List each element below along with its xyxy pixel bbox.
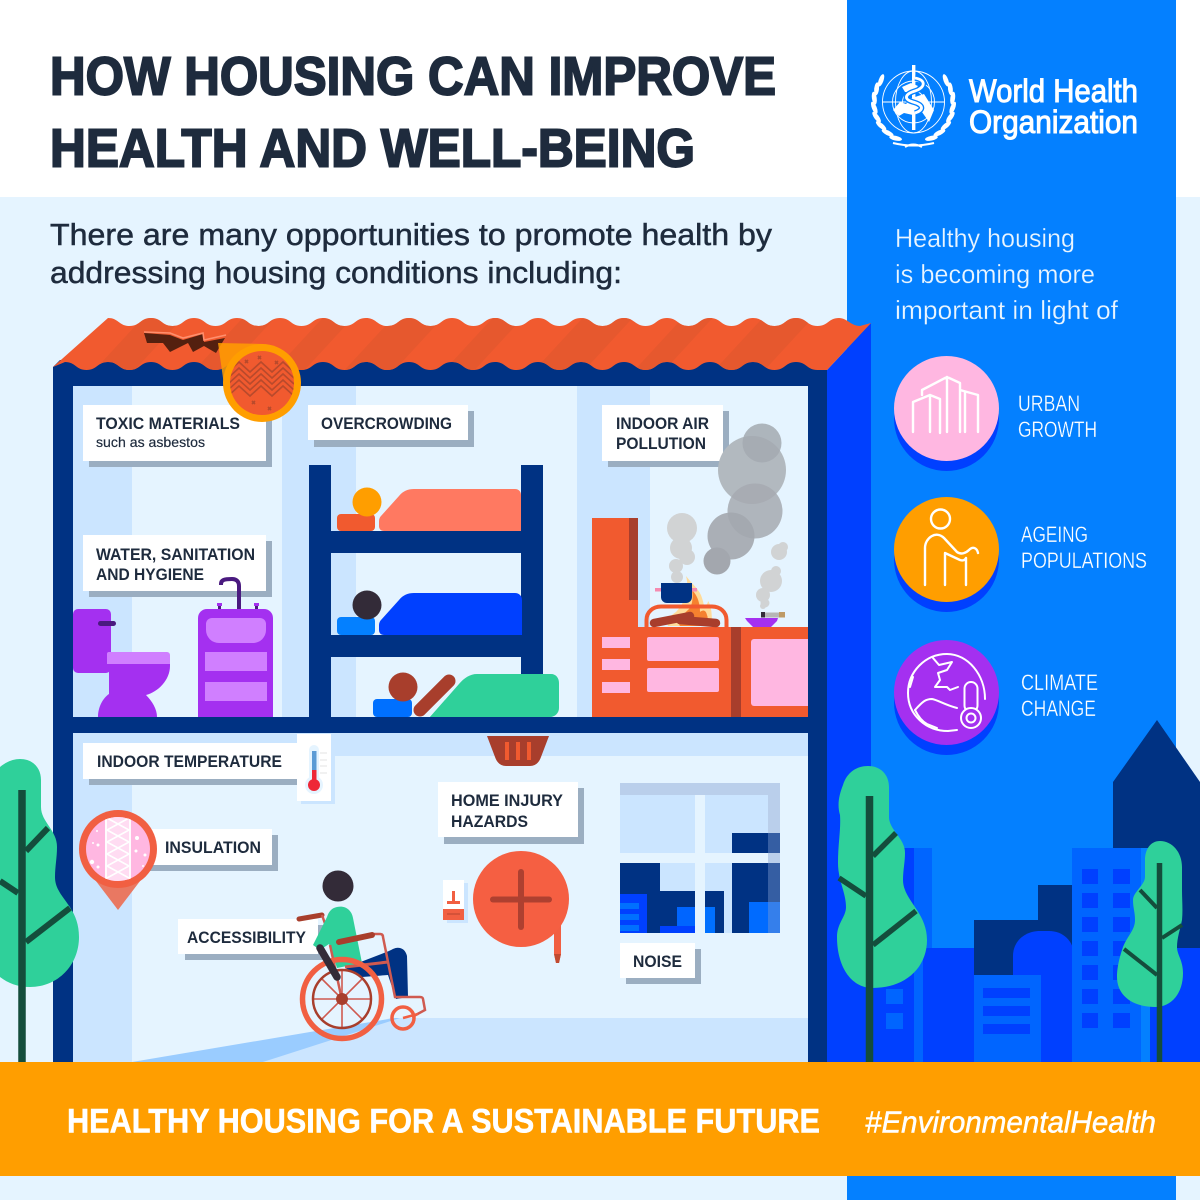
slogan: HEALTHY HOUSING FOR A SUSTAINABLE FUTURE	[67, 1102, 820, 1140]
intro text: There are many opportunities to promote health by	[50, 217, 773, 252]
text: healthy housing: is becoming more	[895, 259, 1095, 289]
logo wordmark: World Health	[969, 73, 1138, 109]
roof	[53, 318, 871, 370]
label: urban growth: GROWTH	[1018, 417, 1097, 442]
label: urban growth: URBAN	[1018, 391, 1080, 416]
item: climate change	[894, 640, 1098, 755]
icon: asbestos magnifier	[218, 343, 301, 422]
tree: right	[1117, 841, 1183, 1062]
icon: toilet	[73, 609, 170, 717]
label: climate change	[1021, 670, 1098, 721]
house: structure	[53, 360, 827, 1062]
fire logs	[654, 616, 716, 623]
intro text: addressing housing conditions including:	[50, 255, 622, 290]
label: ageing populations: AGEING	[1021, 522, 1088, 547]
footer banner	[0, 1062, 1200, 1176]
label: overcrowding	[308, 405, 474, 447]
icon: hot pan hazard	[473, 851, 569, 963]
illustration: bunk beds with occupants	[309, 465, 559, 717]
illustration: smoke	[667, 424, 788, 609]
ashtray and cigarette	[745, 612, 785, 627]
logo wordmark	[969, 73, 1138, 140]
illustration: city skyline	[871, 720, 1200, 1062]
icon: buildings	[913, 377, 978, 433]
tree: middle	[837, 766, 927, 1062]
label: accessibility: ACCESSIBILITY	[187, 929, 306, 947]
bottom sleeper	[373, 672, 559, 717]
label: noise: NOISE	[633, 953, 682, 971]
tree: left	[0, 759, 79, 1062]
text: healthy housing: important in light of	[895, 295, 1119, 325]
label: climate change: CHANGE	[1021, 696, 1096, 721]
icon: insulation map pin	[79, 810, 157, 910]
label: climate change: CLIMATE	[1021, 670, 1098, 695]
title: HOW HOUSING CAN IMPROVE	[50, 46, 776, 106]
wheelchair wheel	[302, 960, 382, 1038]
top sleeper	[337, 488, 521, 531]
label: indoor temperature: INDOOR TEMPERATURE	[97, 753, 282, 771]
label: toxic materials: TOXIC MATERIALS	[96, 415, 240, 433]
panel: WHO blue column	[847, 0, 1176, 1200]
label: indoor temperature	[83, 743, 303, 785]
logo: World Health Organization	[870, 65, 1138, 147]
icon: sink	[198, 579, 273, 717]
icon: older person with cane	[925, 510, 978, 585]
middle sleeper	[337, 590, 522, 635]
label: ageing populations: POPULATIONS	[1021, 548, 1147, 573]
icon: cracked roof	[144, 332, 226, 353]
logo wordmark: Organization	[969, 104, 1138, 140]
label: insulation: INSULATION	[165, 839, 261, 857]
intro text	[50, 217, 773, 290]
label: toxic materials	[83, 405, 272, 467]
label: insulation	[150, 829, 278, 871]
icon: WHO emblem	[870, 65, 957, 147]
label: noise	[620, 943, 701, 984]
label: water, sanitation and hygiene	[83, 535, 272, 597]
label: home injury hazards	[438, 782, 584, 844]
title	[50, 46, 776, 178]
illustration: kitchen	[592, 518, 808, 717]
icon: thermometer card	[297, 734, 335, 804]
hashtag: #EnvironmentalHealth	[865, 1104, 1156, 1140]
label: toxic materials: such as asbestos	[96, 434, 205, 450]
label: home injury hazards: HOME INJURY	[451, 792, 563, 810]
icon: globe with thermometer	[908, 654, 985, 731]
item: ageing populations	[894, 497, 1147, 612]
house: side wall	[827, 323, 871, 1062]
title: HEALTH AND WELL-BEING	[50, 118, 695, 178]
front caster	[392, 1007, 418, 1029]
label: water, sanitation and hygiene: WATER, SANITATION	[96, 546, 255, 564]
label: indoor air pollution: POLLUTION	[616, 435, 706, 453]
item: urban growth	[894, 356, 1097, 471]
label: home injury hazards: HAZARDS	[451, 813, 528, 831]
stove frame	[646, 606, 726, 627]
ceiling lamp	[487, 736, 549, 766]
text: healthy housing: Healthy housing	[895, 223, 1075, 253]
label: overcrowding: OVERCROWDING	[321, 415, 452, 433]
fire	[667, 576, 712, 626]
illustration: person in wheelchair	[299, 870, 425, 1038]
cooking pot	[655, 583, 697, 603]
icon: electrical socket	[443, 880, 468, 923]
label: ageing populations	[1021, 522, 1147, 573]
label: accessibility	[178, 919, 323, 960]
label: water, sanitation and hygiene: AND HYGIENE	[96, 566, 204, 584]
text: healthy housing	[895, 223, 1119, 325]
window with city view	[620, 783, 780, 933]
label: indoor air pollution: INDOOR AIR	[616, 415, 709, 433]
label: indoor air pollution	[602, 405, 729, 467]
label: urban growth	[1018, 391, 1097, 442]
